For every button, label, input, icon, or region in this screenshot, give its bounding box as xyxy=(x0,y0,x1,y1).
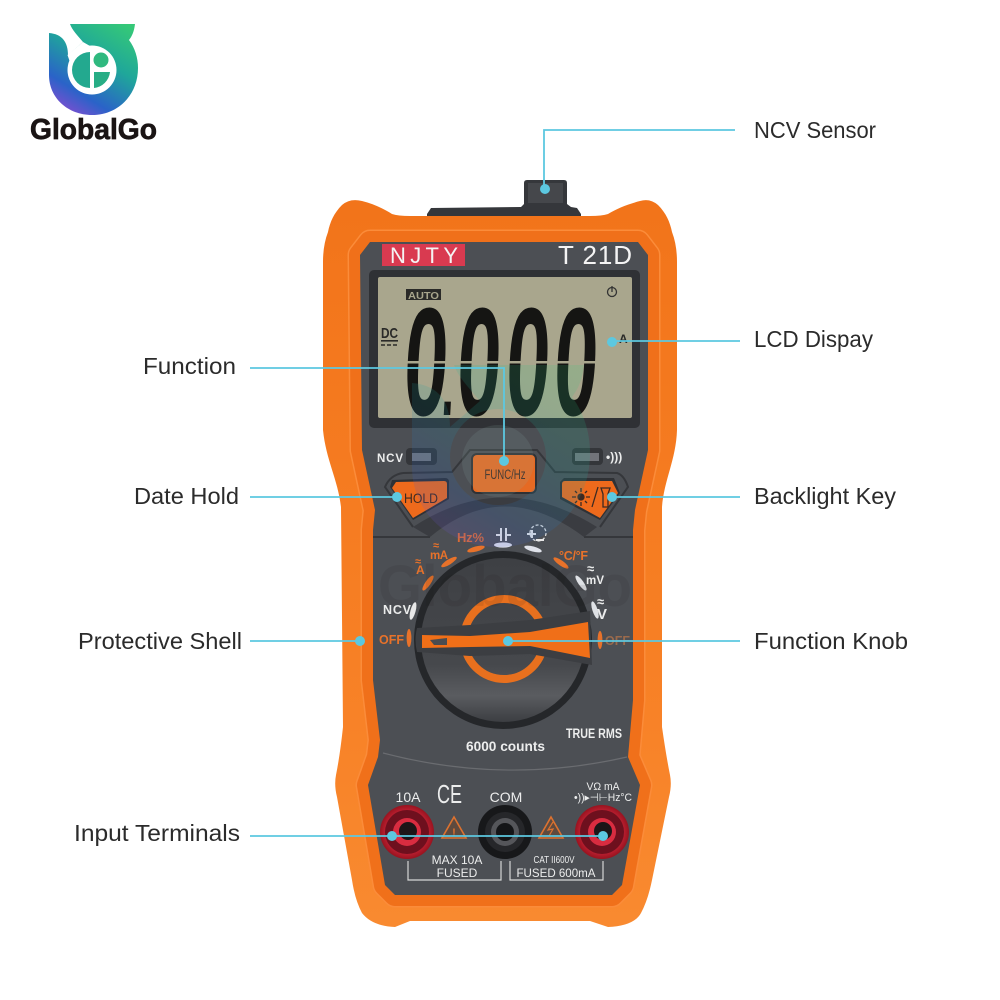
control area contours xyxy=(373,450,633,537)
callout: NCV Sensor: NCV Sensor xyxy=(754,117,876,143)
position: A: ≈ xyxy=(415,556,421,568)
position: mA xyxy=(430,540,458,569)
AUTO badge: AUTO xyxy=(408,291,439,302)
terminal labels: COM xyxy=(490,789,522,805)
multimeter device xyxy=(323,180,677,927)
callout: Function Knob: Function Knob xyxy=(754,628,908,654)
terminal: COM xyxy=(478,805,532,859)
position: NCV xyxy=(383,602,418,620)
unit A: A xyxy=(619,332,628,346)
buzzer indicator xyxy=(572,448,622,465)
callout: Date Hold xyxy=(134,483,402,509)
fuse label 600mA: FUSED 600mA xyxy=(516,866,596,880)
DC indicator: DC xyxy=(381,325,398,342)
position: Hz% xyxy=(457,530,485,554)
panel header xyxy=(382,240,632,270)
position: V xyxy=(590,594,607,623)
position: OFF right: OFF xyxy=(605,634,630,648)
icon: sun and flashlight xyxy=(572,487,610,507)
position: temperature xyxy=(552,549,588,570)
position: A: A xyxy=(416,563,425,577)
position: Hz%: Hz% xyxy=(457,530,484,545)
position: mV: ≈ xyxy=(587,561,594,576)
knob orange ring xyxy=(464,599,544,679)
callout: Backlight Key: Backlight Key xyxy=(754,483,896,509)
position: capacitor xyxy=(494,528,512,548)
LCD reading: 0 xyxy=(550,275,603,448)
icon: auto power off xyxy=(608,286,616,296)
terminal labels: VΩ mA xyxy=(586,781,620,793)
callout: Date Hold: Date Hold xyxy=(134,483,239,509)
position: OFF left xyxy=(379,629,411,647)
callout: Function Knob xyxy=(503,628,908,654)
callout: Protective Shell: Protective Shell xyxy=(78,628,242,654)
dial labels xyxy=(379,525,630,649)
position: mA: mA xyxy=(430,550,448,562)
icon: logo emblem xyxy=(49,24,138,115)
fuse label 10A: FUSED xyxy=(437,866,478,880)
AUTO badge xyxy=(406,289,441,302)
LCD reading: 0 xyxy=(453,275,506,448)
shell inner contour xyxy=(360,242,648,895)
buzzer indicator: •))) xyxy=(606,450,622,464)
terminal: V ohm mA xyxy=(575,805,629,859)
terminal labels xyxy=(396,779,632,809)
position: mV: mV xyxy=(586,575,604,587)
position: V: V xyxy=(597,606,607,623)
function knob xyxy=(414,551,592,729)
button: FUNC/Hz: FUNC/Hz xyxy=(484,467,526,482)
DC indicator xyxy=(381,325,398,345)
callout: Function xyxy=(143,353,509,466)
model T 21D: T 21D xyxy=(558,240,632,270)
fuse label 10A: MAX 10A xyxy=(432,853,482,867)
position: temperature: °C/°F xyxy=(559,549,588,563)
callout: Protective Shell xyxy=(78,628,365,654)
callout: Function: Function xyxy=(143,353,236,379)
logo wordmark: GlobalGo xyxy=(30,114,157,146)
icon: warning triangle left: ! xyxy=(452,827,456,839)
icon: warning triangle right xyxy=(539,817,563,838)
knob handle xyxy=(416,611,592,665)
button: FUNC/Hz xyxy=(471,453,537,494)
NCV indicator: NCV xyxy=(377,453,403,465)
terminal labels: •))▸⊣⊢Hz°C xyxy=(574,792,632,804)
position: NCV: NCV xyxy=(383,603,412,617)
watermark logo xyxy=(412,365,590,547)
LCD reading: 0 xyxy=(400,275,453,448)
6000 counts: 6000 counts xyxy=(466,738,545,754)
brand badge NJTY: NJTY xyxy=(390,243,458,268)
button: HOLD xyxy=(390,478,449,520)
position: OFF right xyxy=(598,631,630,649)
fuse label 600mA: CAT II600V xyxy=(534,854,574,866)
terminal labels: CE xyxy=(437,779,462,809)
front panel xyxy=(360,242,648,895)
shell inner contour highlight xyxy=(360,242,648,895)
fuse label 10A xyxy=(408,853,501,880)
LCD reading: 0 xyxy=(502,275,555,448)
button: HOLD: HOLD xyxy=(404,490,438,506)
callout: NCV Sensor xyxy=(540,117,876,194)
LCD reading: . xyxy=(440,334,458,435)
callout: LCD Dispay: LCD Dispay xyxy=(754,326,873,352)
terminal section divider xyxy=(383,753,627,770)
NCV indicator xyxy=(377,448,437,465)
icon: warning triangle left xyxy=(442,817,466,839)
position: mV xyxy=(574,561,604,592)
watermark wordmark: GlobalGo xyxy=(378,554,632,619)
callout: Input Terminals xyxy=(74,820,608,846)
NCV sensor tip and top bar xyxy=(427,180,581,218)
position: OFF left: OFF xyxy=(379,633,404,647)
logo: GlobalGo xyxy=(30,24,157,146)
terminal labels: 10A xyxy=(396,789,421,805)
TRUE RMS: TRUE RMS xyxy=(566,726,622,741)
button: backlight xyxy=(560,478,620,520)
position: V: ≈ xyxy=(597,594,604,609)
callout: Input Terminals: Input Terminals xyxy=(74,820,240,846)
LCD display xyxy=(369,270,640,448)
position: mA: ≈ xyxy=(433,540,439,552)
position: continuity xyxy=(524,525,546,554)
terminal: 10A xyxy=(380,805,434,859)
fuse label 600mA xyxy=(510,854,603,880)
protective orange shell xyxy=(323,200,677,927)
callout: Backlight Key xyxy=(607,483,896,509)
position: A xyxy=(415,556,435,592)
callout: LCD Dispay xyxy=(607,326,873,352)
